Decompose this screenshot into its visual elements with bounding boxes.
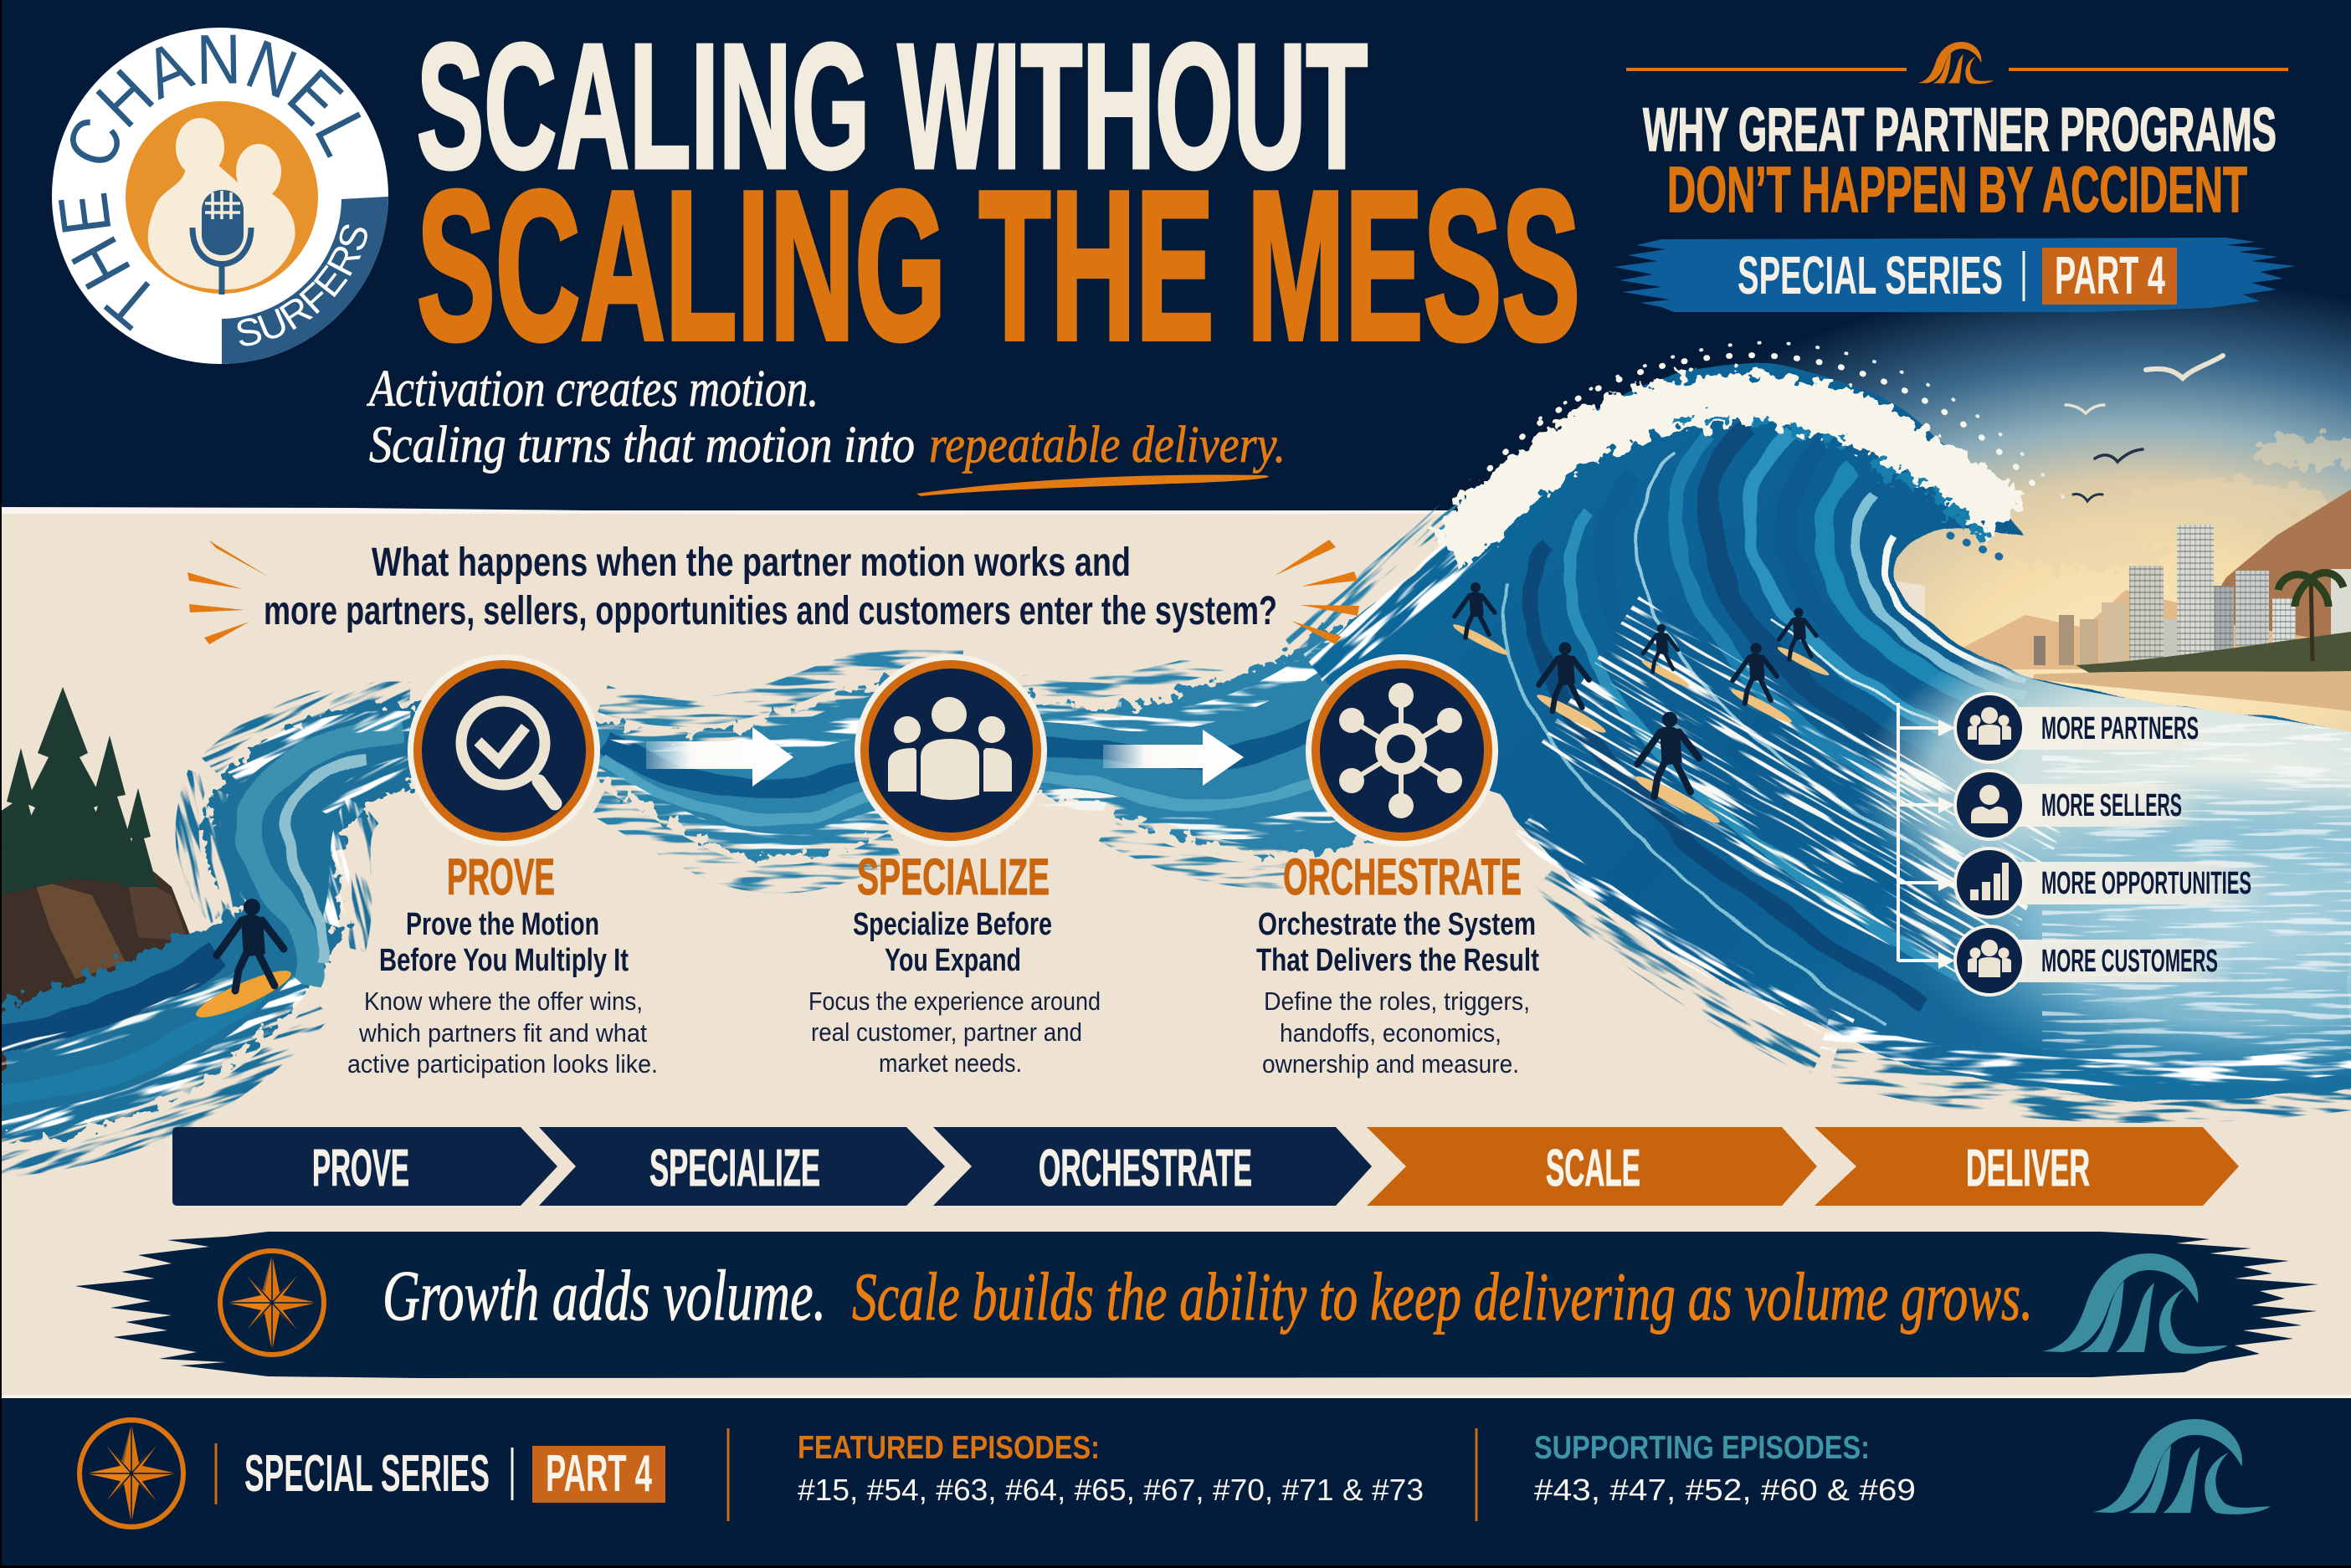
panel: specialize step: You Expand (885, 943, 1021, 978)
panel: prove step (347, 654, 658, 1079)
panel: prove step: PROVE (447, 848, 555, 905)
panel: specialize step: Specialize Before (853, 907, 1052, 942)
foam streaks left of crest (1198, 377, 1598, 777)
icon: magnifier check (408, 654, 600, 847)
footer (0, 1395, 2351, 1565)
supporting episodes: SUPPORTING EPISODES: (1534, 1430, 1870, 1466)
icon: left emphasis rays (187, 541, 269, 644)
chevron: scale: SCALE (1546, 1140, 1640, 1197)
icon: orange wave (1917, 42, 1994, 84)
top right header block: PART 4 (2055, 245, 2165, 305)
panel: prove step: active participation looks like. (347, 1049, 658, 1079)
panel: specialize step (808, 654, 1101, 1078)
chevron: deliver: DELIVER (1966, 1140, 2090, 1197)
panel: more list: MORE SELLERS (2041, 788, 2182, 823)
panel: specialize step: Focus the experience around (808, 986, 1101, 1016)
question heading (264, 541, 1277, 633)
panel: prove step: Before You Multiply It (379, 943, 629, 978)
chevron: scale (1367, 1127, 1817, 1206)
illustration: middle wave band (586, 619, 1507, 879)
panel: orchestrate step: ownership and measure. (1262, 1049, 1519, 1079)
panel: cream middle band (0, 510, 2351, 1397)
shallow water near shore (1858, 653, 2351, 1088)
icon: right emphasis rays (1275, 540, 1359, 644)
icon: more customers (1955, 926, 2024, 995)
panel: prove step: Know where the offer wins, (364, 986, 643, 1016)
panel: orchestrate step: Define the roles, triggers, (1264, 986, 1530, 1016)
icon: footer compass (80, 1420, 183, 1527)
chevron: specialize: SPECIALIZE (649, 1140, 820, 1197)
panel: prove step: which partners fit and what (358, 1018, 647, 1048)
arrow: prove to specialize (646, 727, 793, 787)
top right header block (1614, 42, 2296, 312)
banner: special series part 4 (1614, 238, 2296, 312)
panel: specialize step: real customer, partner and (811, 1017, 1082, 1047)
icon: network hub (1306, 654, 1498, 847)
panel: orchestrate step: Orchestrate the System (1258, 907, 1536, 942)
question heading: more partners, sellers, opportunities and customers enter the system? (264, 589, 1277, 633)
chevron: prove (172, 1127, 557, 1206)
title: SCALING WITHOUT (417, 7, 1368, 205)
featured episodes (798, 1430, 1424, 1507)
icon: seagulls (2066, 356, 2223, 501)
panel: specialize step: SPECIALIZE (857, 848, 1050, 905)
icon: more partners (1955, 694, 2024, 762)
panel: orchestrate step: handoffs, economics, (1280, 1018, 1501, 1048)
question heading: What happens when the partner motion works and (372, 541, 1131, 585)
featured episodes: #15, #54, #63, #64, #65, #67, #70, #71 & #73 (798, 1473, 1424, 1507)
panel: more list: MORE CUSTOMERS (2041, 944, 2218, 979)
panel: specialize step: market needs. (879, 1048, 1022, 1078)
footer: SPECIAL SERIES (244, 1445, 490, 1503)
panel: orchestrate step: That Delivers the Result (1256, 943, 1539, 978)
top right header block: SPECIAL SERIES (1738, 245, 2003, 305)
icon: more sellers (1955, 771, 2024, 839)
icon: footer wave (2092, 1419, 2271, 1514)
icon: more opportunities (1955, 848, 2024, 917)
chevron: deliver (1815, 1127, 2239, 1206)
tagline (367, 361, 1286, 496)
chevron: orchestrate: ORCHESTRATE (1039, 1140, 1252, 1197)
logo: The Channel Surfers: SURFERS (238, 224, 367, 346)
tagline: repeatable delivery. (929, 417, 1286, 474)
panel: left rocky shore with trees (0, 687, 194, 1084)
arrow: specialize to orchestrate (1103, 730, 1244, 786)
icon: teal wave (2042, 1253, 2228, 1354)
banner: growth message (75, 1232, 2318, 1378)
illustration: left wave with surfer (0, 619, 455, 1259)
supporting episodes: #43, #47, #52, #60 & #69 (1534, 1473, 1916, 1507)
illustration: big wave with curl and crest (1284, 341, 2351, 1123)
chevron: specialize (539, 1127, 945, 1206)
icon: compass (220, 1251, 324, 1355)
sky behind big wave (1456, 0, 2351, 736)
panel: more list: MORE PARTNERS (2041, 711, 2199, 746)
chevron: prove: PROVE (312, 1140, 409, 1197)
tagline: Activation creates motion. (367, 361, 819, 418)
logo: The Channel Surfers: THE CHANNEL (59, 35, 362, 331)
footer: PART 4 (546, 1445, 652, 1503)
panel: more list (1898, 694, 2270, 995)
featured episodes: FEATURED EPISODES: (798, 1430, 1100, 1466)
icon: team (855, 654, 1047, 847)
chevron: orchestrate (933, 1127, 1372, 1206)
clouds (2017, 435, 2351, 571)
wave face streaks (1542, 596, 2061, 973)
panel: orchestrate step: ORCHESTRATE (1283, 848, 1522, 905)
panel: coastal city scene (1950, 489, 2351, 711)
chevron process bar (172, 1127, 2239, 1206)
wave lower edge brush (1419, 683, 1953, 1206)
title (417, 7, 1580, 384)
icon: surfers on the big wave (1451, 582, 1831, 828)
tagline: Scaling turns that motion into (369, 417, 915, 474)
supporting episodes (1534, 1430, 1916, 1507)
icon: surfer left (192, 899, 295, 1025)
crest foam (1448, 399, 2009, 548)
panel: orchestrate step (1256, 654, 1539, 1079)
panel: prove step: Prove the Motion (406, 907, 599, 942)
banner: growth message: Growth adds volume. (382, 1255, 826, 1335)
